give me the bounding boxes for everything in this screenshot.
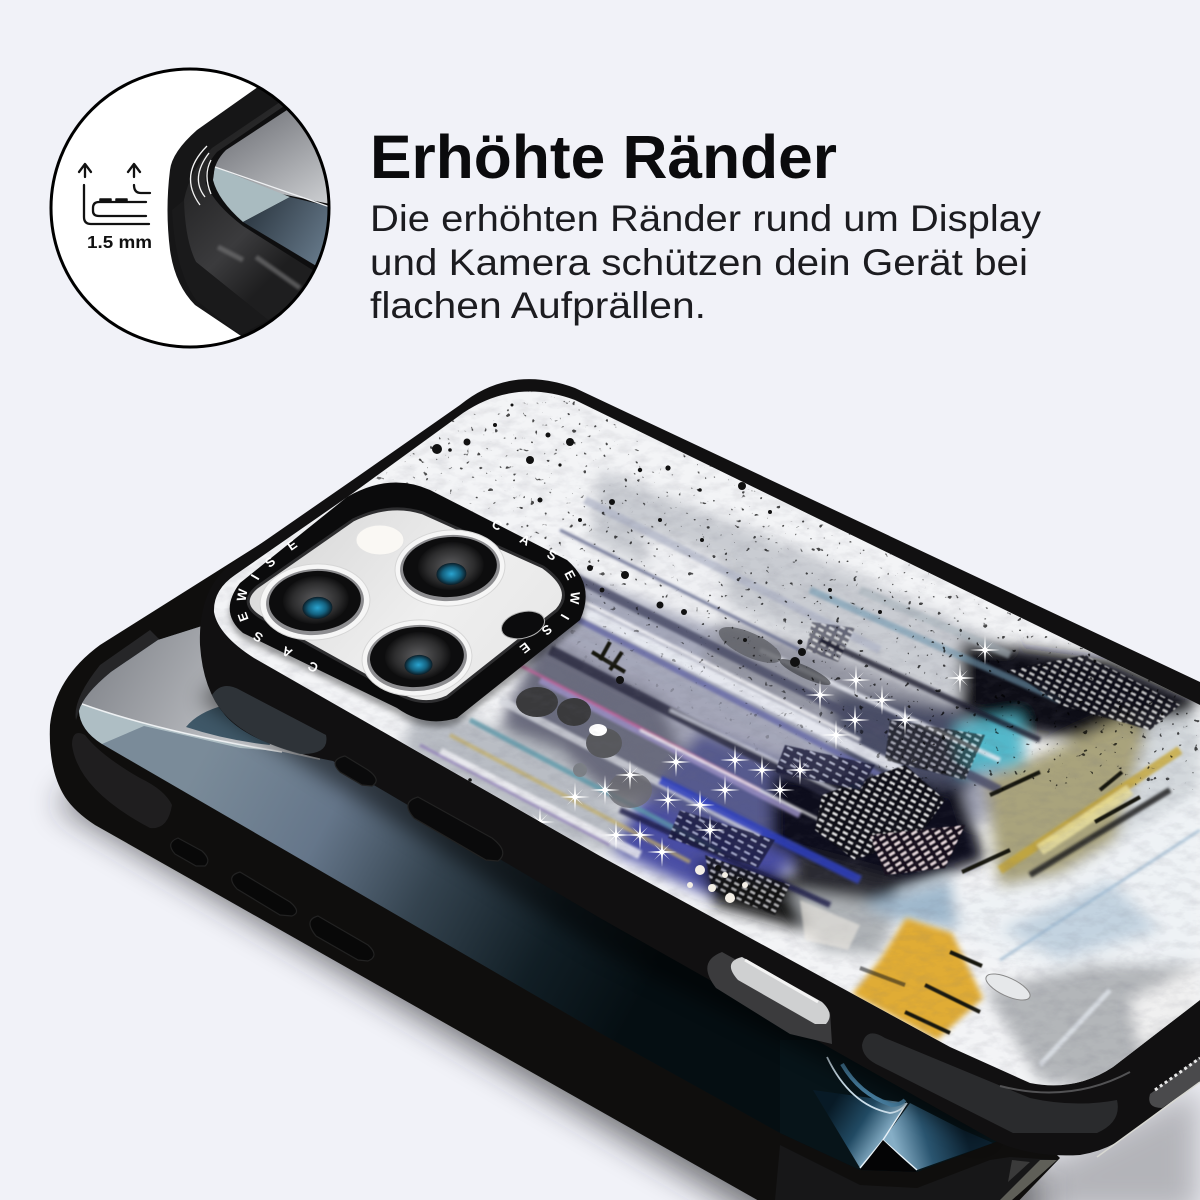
case corner highlights <box>212 686 326 754</box>
camera ring <box>230 482 586 721</box>
taxi paint <box>852 918 983 1040</box>
drop shadow under phones <box>56 774 1200 1200</box>
charging port <box>707 952 832 1044</box>
CASEWISE ring lettering: I <box>558 612 572 622</box>
description text: Die erhöhten Ränder rund um Display <box>370 198 1042 239</box>
CASEWISE ring lettering: S <box>262 553 278 571</box>
magnified case rim <box>168 88 280 336</box>
CASEWISE ring lettering: A <box>279 643 295 661</box>
back phone screen <box>79 626 996 1172</box>
CASEWISE ring lettering <box>234 516 583 676</box>
microphone hole <box>498 607 548 643</box>
CASEWISE ring lettering: E <box>517 639 533 657</box>
back frame highlight and silver edge <box>775 1145 1057 1200</box>
artwork streaks <box>420 500 1200 1065</box>
CASEWISE ring lettering: W <box>567 591 583 605</box>
city window lights <box>668 622 1180 915</box>
CASEWISE ring lettering: C <box>305 658 321 676</box>
camera glass <box>248 509 563 702</box>
artwork colour fields <box>400 470 1200 1090</box>
impact arcs <box>191 146 211 205</box>
CASEWISE ring lettering: S <box>539 621 555 639</box>
top phone side buttons <box>335 756 503 861</box>
CASEWISE ring lettering: I <box>248 572 262 582</box>
top phone: back-facing <box>200 370 1200 1157</box>
lens bottom <box>359 616 475 700</box>
description text: flachen Aufprällen. <box>370 285 706 326</box>
water droplet on taxi <box>985 974 1031 1000</box>
back phone frame <box>50 478 1060 1200</box>
CASEWISE ring lettering: E <box>234 610 252 624</box>
glitter sparkles <box>525 635 1000 867</box>
CASEWISE ring lettering: A <box>517 531 533 549</box>
magnified screen <box>214 110 328 204</box>
case artwork: city painting <box>200 370 1200 1090</box>
camera ring shadow <box>230 489 586 727</box>
flash <box>356 525 404 555</box>
CASEWISE ring lettering: C <box>489 516 505 534</box>
ink splatter dots <box>432 404 882 882</box>
magnified detail circle <box>51 69 345 347</box>
icon: raised edge diagram <box>79 164 150 224</box>
paint blots <box>516 620 833 808</box>
CASEWISE ring lettering: W <box>234 587 251 602</box>
speaker cutout <box>1097 1057 1200 1157</box>
lens top right <box>392 526 508 610</box>
white paint splashes <box>687 865 860 950</box>
top phone case body <box>200 379 1200 1155</box>
CASEWISE ring lettering: S <box>250 628 266 646</box>
description text: und Kamera schützen dein Gerät bei <box>370 242 1028 283</box>
camera module <box>230 482 586 727</box>
CASEWISE ring lettering: E <box>561 568 579 583</box>
description text <box>370 198 1042 326</box>
label: 1.5 mm: 1.5 mm <box>87 232 152 252</box>
painted taxi lettering <box>592 642 1140 1033</box>
back phone: front-facing with screen <box>50 542 1060 1200</box>
heading: Erhöhte Ränder <box>370 123 837 191</box>
lens left <box>257 560 373 644</box>
top phone shadow on screen <box>200 640 1010 1140</box>
paint mottling <box>200 370 1200 1090</box>
CASEWISE ring lettering: S <box>544 546 560 564</box>
fine ink speckle <box>364 392 1200 790</box>
CASEWISE ring lettering: E <box>284 536 300 554</box>
back phone buttons <box>171 838 374 961</box>
